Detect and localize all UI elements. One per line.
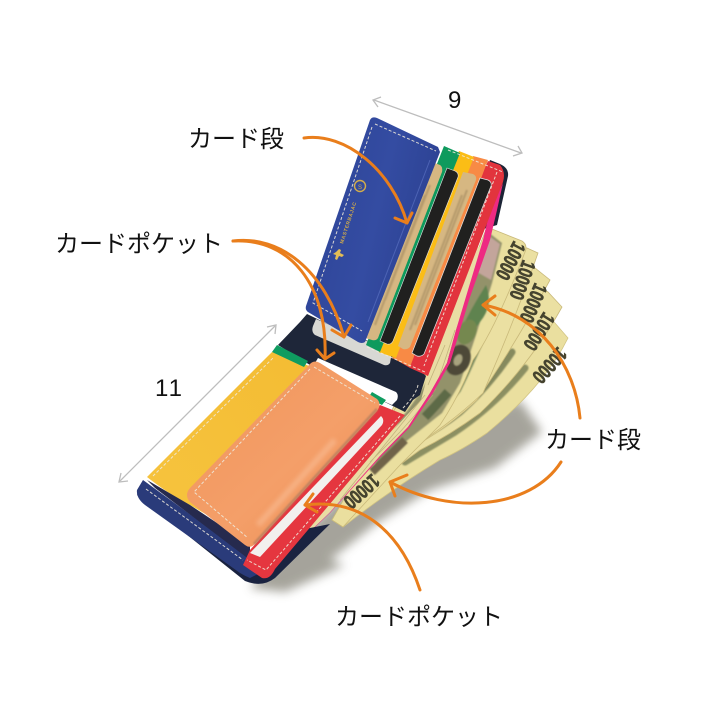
cast shadow [250, 400, 542, 592]
green layer [366, 146, 460, 352]
banknote 3 [350, 262, 552, 495]
gold logo [354, 180, 366, 192]
arrow to bill slot lower [390, 462, 561, 503]
red pocket stitching [247, 416, 400, 570]
banknote 3: 10000 [515, 280, 552, 326]
arrow to bill slot upper [483, 296, 580, 418]
green strip [272, 345, 308, 367]
banknote portrait engraving [370, 232, 502, 472]
orange layer [392, 156, 488, 367]
yellow panel stitching [153, 357, 274, 476]
navy pocket [147, 480, 250, 560]
arrow to card slots [304, 137, 412, 223]
flap right edge shading [254, 409, 377, 544]
red layer stitching [424, 172, 497, 366]
gold brand text: MASTERBAJAC [339, 201, 358, 245]
card stack stitching [367, 150, 503, 372]
flap highlight [258, 440, 335, 525]
upper wallet back panel [440, 160, 508, 300]
flap body [306, 117, 440, 343]
banknote 1 [332, 227, 530, 527]
black card 1 [380, 168, 458, 344]
flap stitching [313, 124, 436, 331]
tan card 1 [362, 162, 442, 340]
red layer [393, 161, 504, 376]
arrows to card pockets [233, 240, 351, 359]
tan card 2 [398, 172, 476, 349]
fold page lines [340, 330, 455, 500]
banknote 2: 10000 [505, 257, 540, 303]
yellow left panel [147, 352, 312, 540]
pink lining [272, 183, 503, 567]
wallet photo [137, 117, 572, 584]
green corner [368, 392, 386, 405]
banknote denominations: 10000 [339, 470, 384, 513]
label: card pocket left: カードポケット [55, 231, 223, 258]
orange card flap [187, 362, 380, 547]
dimension label 9: 9 [448, 87, 461, 114]
yellow layer [378, 151, 474, 358]
banknote 4: 10000 [519, 309, 560, 355]
banknote 4 [345, 285, 562, 505]
grey card in upper pocket [312, 319, 392, 365]
navy inner lining [278, 314, 426, 412]
banknote 2 [355, 245, 540, 490]
arrow to lower card pocket [305, 494, 420, 590]
banknote denominations: 10000 [491, 238, 530, 284]
white card in red pocket [250, 416, 383, 557]
blue upper flap [306, 117, 440, 343]
banknote 5: 10000 [528, 343, 572, 388]
label: card slots top: カード段 [188, 126, 284, 153]
flap stitching [194, 367, 375, 538]
gold logo: S [358, 185, 362, 191]
label: bill slots right: カード段 [545, 427, 641, 454]
lower wallet outer shell [137, 480, 330, 584]
banknotes fan [332, 227, 572, 527]
dimension arrow: length 11 [119, 325, 276, 482]
white card behind flap [312, 358, 398, 405]
gold cross mark [333, 249, 344, 260]
label: card pocket bottom: カードポケット [335, 604, 503, 631]
red lower pocket [243, 405, 405, 578]
dimension label 11: 11 [155, 375, 184, 402]
inner tan fold of banknotes [273, 247, 485, 567]
black card 2 [412, 178, 491, 356]
upper card stack [362, 146, 504, 376]
banknote denominations [339, 238, 530, 513]
dimension arrow: width 9 [373, 97, 522, 156]
banknote 5 [332, 315, 572, 527]
flap edge highlight [368, 160, 430, 322]
